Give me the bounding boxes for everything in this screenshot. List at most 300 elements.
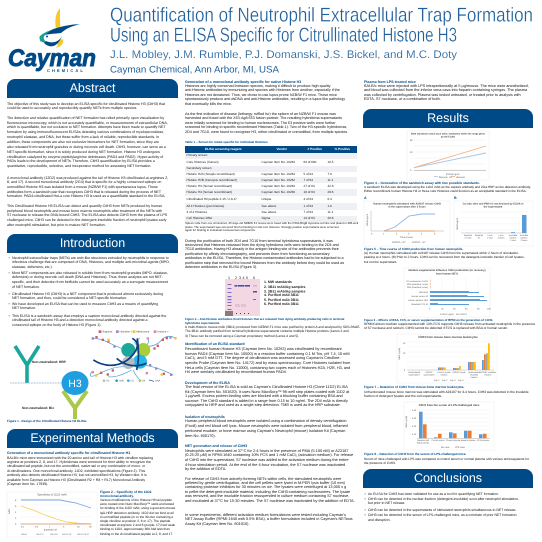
label: detection: Non-neutralized: Bio (22, 406, 54, 410)
subheading: NET generation: NET generation and release of CitH3 (185, 444, 247, 448)
text: ELISA standard: CaCl₂, and 5 mM DTT. The degree of citrullination was assessed using Cayman's Citrulline- (185, 356, 341, 360)
figure 3: gel: 3 (239, 276, 241, 280)
bullet 3 (8, 292, 163, 300)
text: purification paragraph: During the purification of both 2D4 and 7G10 from terminal hybridoma supernatants, it was (185, 238, 333, 242)
figure 2: specificity chart: 4 (15, 511, 17, 514)
table: ELISA screen: 11.1 (328, 178, 333, 182)
figure 7: mouse leukocytes chart: fraction (471, 376, 478, 379)
text: ELISA standard: human PAD4 (Cayman Item No. 10500) in a reaction buffer containing 0.1 M Tris, pH 7.4, 10 mM (185, 352, 350, 356)
figure 7: mouse leukocytes chart: Exp 2 (442, 379, 448, 382)
figure 5A: time course line chart: 1 (383, 232, 385, 236)
figure 8: LPS mouse serum chart: EDTA plasma (477, 439, 490, 442)
figure 5B: bar chart: Lysis (488, 234, 492, 237)
affiliation: Cayman Chemical, Ann Arbor, MI, USA (110, 64, 280, 76)
text: neutrophil isolation (185, 419, 348, 438)
figure 5A: time course line chart: Human neutrophils stimulated with A23187 release CitH3 (373, 202, 441, 206)
text: native histone 1 (185, 84, 346, 106)
text: purification paragraph: purification by affinity chromatography, and prevents them from functioning as secondary (185, 252, 330, 256)
legend: gel lanes: 4. Purified mAb 3B11 (264, 293, 299, 297)
caption: figure 4 (364, 181, 531, 193)
list: introduction bullets: • (8, 292, 10, 296)
subheading: native histone antibody: Generation of a monoclonal antibody specific for native Histone H3 (185, 80, 301, 84)
figure 6: medium bar chart: Human serum 10 (411, 295, 429, 298)
bullet 2: of NET formation. (12, 285, 40, 289)
text: abstract background: formation by using immunofluorescent ELISAs detecting various combinations of myeloperoxidase, (7, 130, 164, 134)
text: table note (185, 221, 358, 232)
text: abstract objective: The objective of this study was to develop an ELISA specific for citrullinated Histone H3 (CitH3) that (7, 102, 165, 106)
table: ELISA screen: Vendor (276, 147, 287, 151)
figure 5B: bar chart: fraction (521, 236, 528, 240)
diagram: nucleosome (90, 330, 177, 382)
table: ELISA screen: 11.1 (328, 210, 333, 214)
caption title: monoclonal antibody. (100, 494, 134, 498)
table: ELISA screen: Histone H2B (Xenopus recombinant) (186, 178, 237, 182)
legend: gel lanes (264, 280, 305, 306)
figure 8: LPS mouse serum chart: 0.10 (412, 433, 417, 436)
text: CitH3 release: was removed, and the insoluble fraction resuspended in culture medium containing S7 nuclease, (185, 494, 349, 498)
legend: histones: H3 (106, 380, 109, 382)
text: abstract background: PADs leads to the development of NETs. Therefore, CitH3 quantification by ELISA provides a (7, 159, 155, 163)
caption: figure 3 title: Figure 3 – Anti-Histone antibodies bind Histones that are released from dying antibody-producing cells in terminal (185, 317, 344, 321)
icon: detection antibody (63, 391, 87, 419)
figure 2: specificity chart: 6 (15, 505, 17, 508)
text: purification paragraph: purification step that removed the bound Histones from the antibody before they could be used as (185, 261, 344, 265)
legend: histones: DNA (155, 380, 160, 382)
table: ELISA screen: Citrullinated H3 peptide 2-15 / 2,8,17 (186, 197, 237, 201)
line: histone tail (10, 382, 63, 384)
caption text: fraction of detergent lysates and the cell supernatants. (364, 394, 442, 398)
conclusion 4: CitH3 can be detected in the serum of LPS-challenged mice, as a correlate of prior NET formation (368, 513, 517, 517)
bullet 2: specific, and their detection from biofluids cannot be used accurately as a surrogate measurement (12, 280, 168, 284)
figure 5A: time course line chart: 2 (396, 232, 398, 236)
legend: histones (103, 379, 160, 382)
conclusion 4 (368, 513, 517, 523)
figure 2: specificity chart: A450 (8, 508, 11, 514)
text: ELISA development: Kit (Cayman Item No. 501620). It uses Nunc MaxiSorp™ 96-well strip plates coated with 11D2 at (185, 390, 349, 394)
caption: figure 3 text: The 3B11 antibody purified from terminal hybridoma supernatants contains multiple Histone proteins (Lanes 2 and (185, 329, 349, 333)
figure 4: standards chart (407, 131, 489, 180)
subheading: ELISA standard: Identification of an ELISA standard (185, 342, 245, 346)
figure 4: standards chart: 0 (410, 169, 412, 172)
figure 4: standards chart: Histones (456, 176, 466, 179)
text: neutrophil isolation: peritoneal exudate, or bone marrow using Cayman's Neutrophil (mouse) Isolation Kit (Cayman (185, 429, 345, 433)
caption text (364, 456, 529, 465)
figure 2: specificity chart: H3 cit 2,8,17 (77, 533, 90, 536)
figure 6: medium bar chart: Standard FCS 10 (411, 303, 429, 306)
text: abstract background: quantitative, reproducible, selective, and inexpensive method for assessing NET formation. (7, 164, 151, 168)
figure 7: mouse leukocytes chart: 40 (403, 342, 406, 345)
figure 5B: bar chart: 2 hours (498, 236, 504, 240)
heading: Abstract: Abstract (70, 81, 115, 95)
bullet 1 (8, 256, 170, 269)
caption: figure 6 (364, 318, 535, 330)
bullet 5: citrullinated tail of Histone H3 and a detection monoclonal antibody directed against a (12, 318, 147, 322)
conclusion 2: CitH3 can be detected in the nuclear fraction (detergent-insoluble) soon after neutrophil stimulation, (368, 497, 519, 501)
text: abstract antibodies: antibodies form a sandwich pair that recognizes CitH3 that is released during the process of NET (7, 190, 161, 194)
figure 5A: time course line chart: Time (hours) (400, 236, 413, 239)
figure 7: mouse leukocytes chart: Unstim. lysate (437, 371, 451, 374)
text: table note: again for binding to individual nucleosomal components. (185, 228, 256, 232)
text: antibody generation (7, 456, 153, 486)
figure 5B: bar chart: Basal/wt (475, 234, 483, 237)
figure 6: medium bar chart (404, 268, 491, 317)
figure 7: mouse leukocytes chart: A23187 insoluble (480, 371, 497, 374)
bullet 5 (8, 314, 166, 327)
figure 6: medium bar chart: 10% BSA (419, 291, 429, 294)
figure 3: gel: 6 (253, 276, 255, 280)
table: ELISA screen: 3 of 4 Histones (186, 210, 207, 214)
legend: modifications (99, 330, 169, 333)
table: ELISA screen: 1 of 63 (304, 204, 313, 208)
legend: histones: H3 (131, 380, 134, 382)
text: purification paragraph: antibodies in the ELISA. Therefore, the Histone-contaminated antibodies had to be subjected to a (185, 256, 344, 260)
text: abstract results: S7 nuclease to release the DNA-bound CitH3. The ELISA also detects CitH3 from the plasma of LPS (7, 213, 167, 217)
text: antibody generation: arginine at positions 2, 8, and 17. Hybridomas were screened for their ability to recognize the (7, 460, 151, 464)
figure 8: LPS mouse serum chart: Control serum (431, 439, 445, 442)
caption text (100, 498, 176, 536)
figure 7: mouse leukocytes chart: A23187 lysate (452, 371, 466, 374)
table: ELISA screen: 63 of 600 (304, 160, 316, 164)
figure 8: LPS mouse serum chart: Samples with (417, 439, 430, 442)
text: antibody generation: citrullinated tail peptide, but not the unmodified, native tail or any combination of mono- or (7, 464, 145, 468)
list: introduction bullets: • (8, 256, 10, 260)
figure 5B: bar chart: Lysis (499, 234, 503, 237)
legend: modifications: Histidine + (120, 330, 132, 333)
caption: figure 3 title (185, 317, 344, 325)
table: ELISA screen: All 4 Histones (pan histone) (186, 204, 224, 208)
text: ELISA development: conjugated to HRP and used as a single-step detection. TMB is used as the HRP substrate. (185, 403, 341, 407)
text: abstract results: challenged mice. CitH3 can be detected in the detergent-insoluble fraction of neutrophil lysates early (7, 218, 166, 222)
caption text (364, 390, 529, 398)
subheading: antibody generation: Generation of a monoclonal antibody specific for citrullinated Histone H3 (7, 451, 130, 455)
text: purification paragraph: discovered that Histones released from the dying hybridoma cells were binding to the 2D4 and (185, 243, 339, 247)
legend: histones: H4 (142, 380, 145, 382)
authors: J.L. Mobley, J.M. Rumble, P.J. Domanski, J.S. Bickel, and M.C. Doty (110, 49, 458, 61)
text: antibody generation: (Cayman Item No. 17939). (7, 482, 48, 486)
figure 5B: bar chart: no stim (465, 236, 472, 240)
text: native histone 2: 2D4 and 7G10, were found to recognize H3, either citrullinated or unmodified, from multiple species. (185, 130, 348, 134)
legend: gel lanes: 5. Purified mAb 3B11 (264, 298, 299, 302)
table: ELISA screen: Histone H4 (human recombinant) (186, 190, 232, 194)
figure 3: gel: 1 (228, 276, 230, 280)
figure 2: specificity chart: [peptide] nM (44, 528, 57, 532)
caption text: RPMI/Calcium medium supplemented with 10% FCS supports CitH3 release from activated neutrophils in the presence (364, 322, 535, 326)
caption: figure 1: Figure 1 - Design of the Citrullinated Histone H3 ELISA. (7, 419, 87, 423)
figure 7: mouse leukocytes chart: 0 (404, 369, 406, 372)
logo: Cayman Chemical: Cayman (8, 45, 96, 72)
table: ELISA screen: Cayman Item No. 10266 (262, 190, 295, 194)
text: activation medium (185, 512, 353, 526)
text: ELISA standard: HeLa cells (Cayman Item No. 11000), containing two copies each of Histones H2A, H2B, H3, and (185, 366, 350, 370)
table: ELISA screen: ELISA screening reagent (205, 147, 242, 151)
legend: gel lanes: 6. Purified mAb 3B11 (264, 302, 299, 306)
heading: Experimental Methods (7, 429, 178, 448)
caption: figure 3 text (185, 325, 360, 338)
bullet 2 (8, 271, 168, 289)
table: ELISA screen: 5 of 63 (304, 172, 313, 176)
text: antibody generation: antibody also detects citrullinated Histone H3, but not unmodified H3, by Western blot. It is (7, 473, 147, 477)
caption title: Figure 6 – Effects of BSA, FCS, or serum supplementation of RPMI on the generation of CitH3. (364, 318, 493, 322)
bullet 4: NET formation. (12, 306, 36, 310)
figure 4: standards chart: 80 (410, 139, 413, 142)
figure 7: mouse leukocytes chart: 20 (403, 352, 406, 355)
text: native histone 1: that eventually kills the mice. (185, 102, 232, 106)
text: antibody generation: di-citrullinations. One monoclonal antibody, 11D2, exhibited specifications (Figure 2). This (7, 469, 145, 473)
caption text: to unmodified peptide (or to the 30-mer containing a (100, 515, 173, 519)
caption text: A sandwich ELISA was developed using the 11D2 mAb as the capture antibody and 2G4-HRP as the detection antibody. (364, 185, 531, 189)
figure 6: medium bar chart: 0 (429, 308, 431, 310)
figure 8: LPS mouse serum chart (404, 402, 494, 450)
caption title: Figure 4 – Generation of the sandwich assay with two possible standards. (364, 181, 480, 185)
figure 8: LPS mouse serum chart: No mice (441, 446, 450, 449)
text: plasma (364, 84, 529, 101)
text: abstract antibodies: 8, and 17). A second monoclonal antibody (2G4) that is specific for a highly conserved epitope on (7, 180, 161, 184)
conclusion 4: and disruption. (368, 518, 391, 522)
conclusion 2 (368, 497, 519, 506)
bullet 1: elastase, defensins, etc.). (12, 265, 53, 269)
table: ELISA screen: 18 of 63 (304, 190, 315, 194)
text: neutrophil isolation: Item No. 600170). (185, 434, 216, 438)
figure 6: medium bar chart: S7 nuclease/no CaCl2 (406, 280, 429, 283)
text: NET generation (185, 449, 353, 471)
text: plasma: BALB/c mice were injected with LPS intraperitoneally at 5 μg/mouse. The mice were anesthetized, (364, 84, 529, 88)
figure 6: medium bar chart: 60 (465, 308, 468, 310)
table: ELISA screen: Sigma (262, 216, 270, 220)
list: introduction bullets (8, 256, 170, 327)
table: ELISA screen: Unique (262, 197, 271, 201)
figure 5B: bar chart (454, 201, 533, 246)
text: plasma: EDTA, S7 nuclease, or a combination of both. (364, 97, 441, 101)
caption text: but not the supernatant. (364, 260, 397, 264)
figure 3: gel (225, 276, 260, 316)
text: abstract background: addition, these components are also not exclusive biomarkers for NET formation, since they are (7, 140, 159, 144)
table: ELISA screen: See above (262, 204, 276, 208)
text: ELISA development: 1 μg/well. Excess protein binding sites are blocked with a blocking buffer containing BSA and (185, 394, 343, 398)
figure 5B: bar chart: Basal/wt (464, 234, 472, 237)
figure 5B: bar chart: 1 hour (487, 236, 493, 240)
icon: H3 (62, 371, 88, 395)
subheading: neutrophil isolation: Isolation of neutrophils (185, 414, 225, 418)
bullet 3: NET formation, and thus, could be considered a NET-specific biomarker. (12, 296, 127, 300)
caption text: Unfractionated mouse bone marrow was stimulated with A23187 for 3-4 hours. CitH3 was detected in the insoluble (364, 390, 529, 394)
table: ELISA screen: 28.6 (328, 190, 334, 194)
list: introduction bullets: • (8, 314, 10, 318)
text: abstract background: NET-specific biomarker, since it is solely produced during NET formation. Histone H3 undergoes (7, 150, 160, 154)
text: CitH3 release: and incubated at 37°C for 15-30 minutes. The S7 nuclease was inactivated by the addition of EDTA. (185, 499, 355, 503)
text: abstract background: citrullination catalyzed by enzyme peptidylarginine deiminases (PAD4 and PAD2). Hyper-activity of (7, 155, 163, 159)
text: abstract antibodies (7, 176, 168, 198)
figure 8: LPS mouse serum chart: 0.40 (412, 409, 417, 412)
table: ELISA screen: 20.6 (328, 216, 334, 220)
text: table note: plates. The supernatant was screened first for binding to total core histones. Strongly positive supernatants were screened (185, 225, 339, 229)
figure 2: specificity chart: H3 cit 2 (36, 533, 44, 536)
table: ELISA screen (185, 146, 357, 222)
label: capture: Non-neutralized: HRP (32, 360, 67, 364)
text: NET generation: by the addition of EDTA. (185, 467, 226, 471)
text: native histone 2: were initially screened for binding to human nucleosomes. The 63 positive wells were further (185, 121, 336, 125)
figure 8: LPS mouse serum chart: LPS mice (455, 446, 466, 449)
table: ELISA screen: 7.9 (328, 172, 332, 176)
text: purification paragraph: 7G10 antibodies. Having H3 already in the antigen-binding site of the antibodies prevents their (185, 247, 339, 251)
heading: Experimental Methods: Experimental Methods (30, 431, 155, 445)
figure 2: specificity chart: 1 (49, 526, 51, 528)
figure 7: mouse leukocytes chart: fraction (441, 374, 448, 376)
figure 2: specificity chart: H3 cit 2,8 (62, 533, 72, 536)
figure 8: LPS mouse serum chart: Heparin plasma (461, 439, 476, 442)
figure 5A: time course line chart (364, 201, 450, 246)
bullet 1: Neutrophil extracellular traps (NETs) are web-like structures extruded by neutrophils in response to (12, 256, 169, 260)
text: abstract objective: could be used to accurately and reproducibly quantify NETs from multiple species. (7, 106, 137, 110)
figure 7: mouse leukocytes chart: Unstimulated (408, 371, 421, 374)
figure 7: mouse leukocytes chart (397, 334, 497, 383)
figure 5B: bar chart: Ca only: time and PAD4 is not detected by ELISA in (463, 202, 524, 206)
text: native histone 2 (185, 112, 348, 134)
heading: Conclusions: Conclusions (414, 471, 482, 485)
text: NET generation: 4-hour stimulation period. At the end of the 4-hour incubation, the S7 nuclease was inactivated (185, 463, 345, 467)
text: abstract results (7, 204, 167, 227)
table: ELISA screen: Secondary screen (186, 166, 211, 170)
caption text (364, 322, 535, 330)
text: NET generation: (0.25-25 μM) in RPMI-1640 containing 10% FCS and 1 mM CaCl₂ (activation medium). For release (185, 453, 353, 457)
figure 2: specificity chart (7, 492, 97, 537)
figure 7: mouse leukocytes chart: supernatant (424, 374, 435, 376)
text: abstract results: peripheral blood neutrophils and mouse bone marrow neutrophils after treatment of the NETs with (7, 208, 162, 212)
text: ELISA standard: H4 were similarly citrullinated by recombinant human PAD4. (185, 370, 287, 374)
text: antibody generation: available from Cayman as Histone H3 (Citrullinated R2 + R8 + R17) Monoclonal Antibody (7, 478, 145, 482)
figure 8: LPS mouse serum chart: IS each plasma (446, 439, 461, 442)
text: neutrophil isolation: Human peripheral blood neutrophils were isolated using a combination of density centrifugation (185, 419, 347, 423)
conclusion 1: An ELISA for CitH3 has been validated for use as a tool for quantifying NET formation. (368, 492, 499, 496)
caption text: for binding of the 11D2 mAb, using a goat anti-mouse (100, 506, 175, 510)
table: ELISA screen: Cayman Item No. 10262 (262, 178, 295, 182)
caption text: single citrulline at position 2, 8 or 17). The peptide (100, 519, 170, 523)
caption text: the presence of CitH3. (364, 461, 396, 465)
text: activation medium: In some experiments, different activation medium formulations were tested including Cayman's (185, 512, 346, 516)
text: CitH3 release: to pellet the detergent-insoluble material, including the CitH3-containing nucleosomes. The lysate (185, 490, 350, 494)
figure 5B: bar chart: Insoluble (520, 234, 529, 237)
text: abstract antibodies: unmodified Histone H3 was isolated from a mouse (NZB/W F1) with spontaneous lupus. These (7, 185, 158, 189)
figure 4: standards chart: 40 (410, 151, 413, 154)
table: ELISA screen: Cell Histones DNA (186, 216, 212, 220)
figure 2: specificity chart: 0 (15, 523, 17, 526)
text: NET generation: of CitH3 into the supernatant, S7 nuclease was added to the activation medium during the entire (185, 458, 348, 462)
text: CitH3 release: pelleted by gentle centrifugation, and the cell pellets were lysed in M-PER lysis buffer (10 mm) (185, 481, 345, 485)
legend: gel lanes: 2. 3B11 mAb/Ag samples (264, 285, 305, 289)
figure 3: gel: 2 (235, 276, 237, 280)
text: plasma: was collected by centrifugation. Plasma was tested untreated, or treated prior to analysis with (364, 93, 521, 97)
table: ELISA screen: 1.6 (328, 204, 332, 208)
figure 5A: time course line chart: CitH3 ng/ml (366, 214, 369, 226)
text: abstract background: which is quantifiable, but not exclusive to NET formation. Attempts have been made to quantify NET (7, 125, 166, 129)
table: ELISA screen: 10.5 (328, 160, 334, 164)
figure 5B: bar chart: fraction (510, 236, 517, 240)
text: abstract background: also released from neutrophil granules or during necrosis cell death. CitH3, however, can serve as a (7, 145, 166, 149)
text: abstract background: fluorescence microscopy, which is not accurately quantifiable, or measurements of extracellular DNA, (7, 121, 168, 125)
bullet 4: We have developed an ELISA that can be used to measure CitH3 as a means of quantifying (12, 302, 158, 306)
header: logo and title block (8, 4, 533, 76)
figure 2: specificity chart: H3 wt (21, 533, 27, 536)
figure 6: medium bar chart: 20 (441, 308, 444, 310)
figure 6: medium bar chart: BSA (standard, none) (407, 283, 428, 286)
text: abstract background: The detection and relative quantification of NET formation has relied primarily upon visualization by (7, 116, 164, 120)
figure 6: medium bar chart: 40 (453, 308, 456, 310)
caption: figure 5 (364, 247, 525, 264)
logo: Cayman Chemical (8, 8, 96, 73)
text: abstract antibodies: A monoclonal antibody (12D2) was produced against the tail of Histone H3 citrullinated at arginines 2, (7, 176, 168, 180)
heading: Introduction (7, 234, 178, 253)
icon: capture antibody (15, 346, 39, 383)
legend: gel lanes: 3. 3B11 mAb/Ag samples (264, 290, 305, 294)
text: abstract background: neutrophil elastase, and DNA, but these suffer from a lack of reliable, reproducible standards. In (7, 135, 159, 139)
figure 7: mouse leukocytes chart: Exp 3 (450, 379, 456, 382)
figure 6: medium bar chart: No A23187 (456, 313, 468, 316)
figure 4: standards chart: by the ELISA (441, 136, 455, 138)
heading: Conclusions (363, 469, 533, 488)
figure 5A: time course line chart: 0 (371, 232, 373, 236)
text: native histone 1: spontaneously produce anti-dsDNA and anti-Histone antibodies, resulting in a lupus-like pathology (185, 97, 345, 101)
figure 6: medium bar chart: BSA (standard, none) (407, 286, 428, 289)
list: introduction bullets: • (8, 302, 10, 306)
table: ELISA screen: 7 of 63 (304, 210, 313, 214)
figure 7: mouse leukocytes chart: A23187 (425, 371, 433, 374)
list: conclusions: • (364, 492, 366, 496)
text: CitH3 release: For release of CitH3 from actively-forming NETs within cells, the stimulated neutrophils were (185, 477, 341, 481)
table: ELISA screen: Core Histones (human) (186, 160, 218, 164)
caption title: Figure 8 – Detection of CitH3 from the serum of LPS-challenged mice. (364, 452, 466, 456)
table: ELISA screen: 7 of 63 (304, 178, 313, 182)
figure 2: specificity chart: 30 (89, 526, 92, 528)
legend: modifications: Histone + (157, 330, 169, 333)
text: table note: Spleen cells from one immunized, 26 days old NZB/W F1 mouse were fused with the P3U1/8Ag8 myeloma cell line and plated in 384-well (185, 221, 358, 225)
table: ELISA screen: Cayman Item No. 10263 (262, 160, 295, 164)
caption text: (A) Human neutrophils stimulated with A23187 release CitH3 from the supernatant within 2 hours of stimulation, (364, 251, 519, 255)
caption title: Figure 5 – Time course of CitH3 production from human neutrophils. (364, 247, 463, 251)
table: ELISA screen: 6.3 (328, 197, 332, 201)
caption text (364, 185, 531, 193)
legend: modifications: Methionine (136, 330, 150, 333)
figure 7: mouse leukocytes chart: CitH3 (ng/ml) (398, 347, 401, 360)
figure 5A: time course line chart: A23187 + S7 (392, 241, 406, 244)
figure 6: medium bar chart: 100 (487, 308, 491, 310)
caption title: Figure 7 – Detection of CitH3 from mouse bone marrow leukocytes. (364, 385, 464, 389)
figure 7: mouse leukocytes chart: supernatant (409, 374, 420, 376)
heading: Results (363, 109, 533, 128)
caption text: were coated onto Nunc MaxiSorp™ wells and tested (100, 502, 174, 506)
caption: figure 2 (100, 490, 176, 536)
text: purification paragraph: detection antibodies in the ELISA (Figure 3). (185, 265, 257, 269)
table: ELISA screen: Cayman Item No. 10263 (262, 184, 295, 188)
subheading: ELISA development: Development of the ELISA (185, 380, 230, 384)
figure 8: LPS mouse serum chart: dialog stands (417, 442, 429, 444)
text: purification paragraph (185, 238, 344, 269)
caption text: of S7 nuclease and calcium. CitH3 cannot be detected if FCS is replaced with BSA or human serum. (364, 326, 508, 330)
text: abstract results: This Citrullinated Histone H3 ELISA can detect and quantify CitH3 from NETs produced by human (7, 204, 162, 208)
text: abstract results: after neutrophil stimulation, but prior to mature NET formation. (7, 223, 106, 227)
label: panel B: B (454, 196, 457, 200)
list: conclusions: • (364, 513, 366, 517)
table: ELISA screen: Histone H2A (Sinapis recombinant) (186, 172, 235, 176)
table: ELISA screen: Cayman Item No. 10264 (262, 172, 295, 176)
figure 5B: bar chart: the supernatant (484, 206, 503, 208)
figure 7: mouse leukocytes chart: Exp 4 (458, 379, 464, 382)
caption: figure 3 text: A multi-Histone mouse mAb (3B11) produced from NZB/W F1 mice was purified by protein A and analyzed by SDS-PAGE. (185, 325, 360, 329)
figure 4: standards chart: Recomb. H3 (439, 176, 452, 179)
text: native histone 1: anti-Histone antibodies by immunizing and species with Histones from another, especially if the (185, 88, 340, 92)
figure 6: medium bar chart: A23187 ng/ml (440, 313, 454, 316)
figure 5A: time course line chart: 4 (421, 232, 423, 236)
text: neutrophil isolation: (Ficoll) and red blood cell lysis. Mouse neutrophils were isolated from peripheral blood, inflamed (185, 424, 348, 428)
text: ELISA standard: specific Probe (Cayman Item No. 14172) and by mass spectroscopy. Core Histones isolated from (185, 361, 350, 365)
